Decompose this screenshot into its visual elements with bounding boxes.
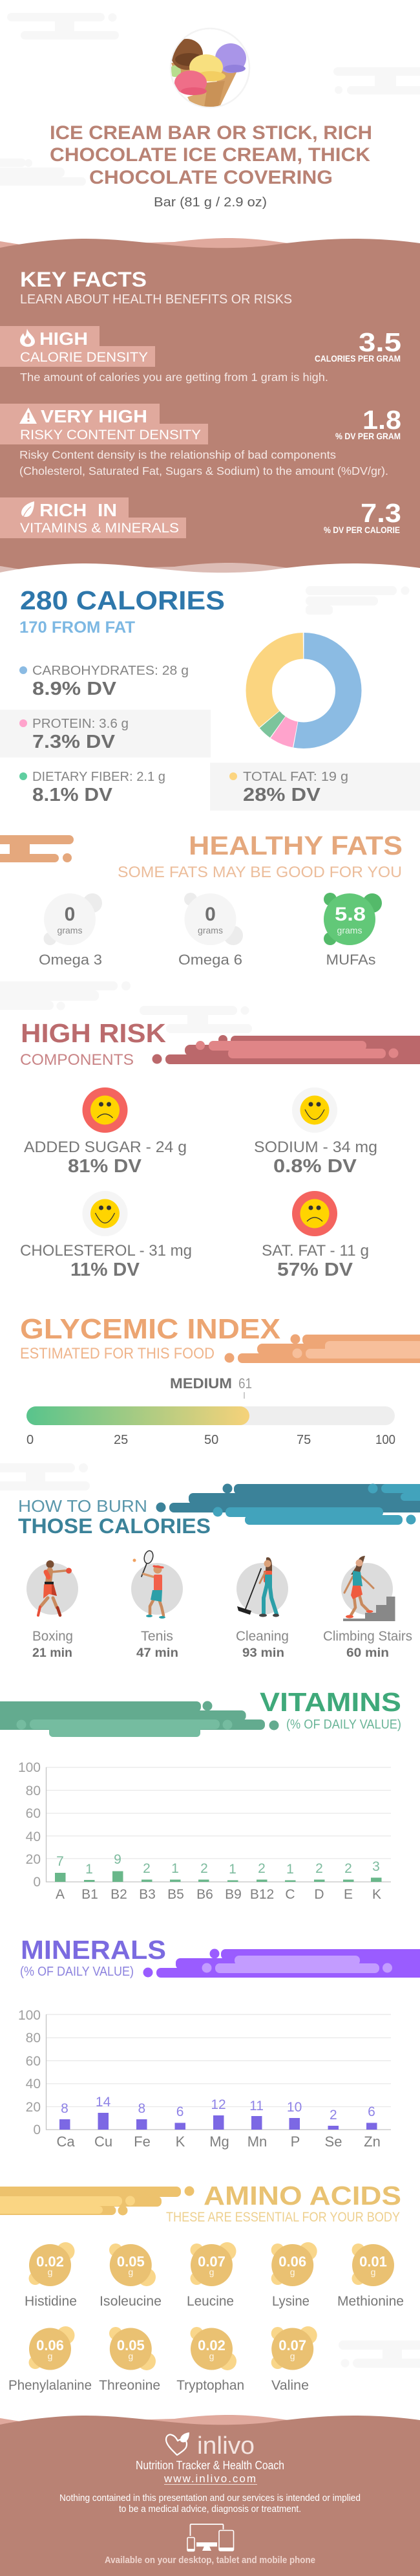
badge: omega 6: 0 bbox=[205, 904, 216, 925]
amino: tryptophan: Tryptophan bbox=[176, 2378, 244, 2393]
bar chart: minerals: Cu bbox=[94, 2134, 112, 2150]
subheading: from fat: 170 FROM FAT bbox=[19, 618, 135, 637]
amino: isoleucine: 0.05 bbox=[117, 2254, 145, 2269]
fact: calorie density: HIGH bbox=[39, 329, 88, 349]
activity: cleaning: 93 min bbox=[242, 1646, 284, 1660]
component: cholesterol: 11% DV bbox=[70, 1260, 140, 1280]
title: ICE CREAM BAR OR STICK, RICH bbox=[50, 122, 372, 144]
panel: healthy fats bbox=[0, 831, 403, 968]
component: sodium: 0.8% DV bbox=[273, 1156, 357, 1177]
heading: high risk: HIGH RISK bbox=[21, 1018, 166, 1048]
decorative banner bbox=[152, 1035, 420, 1064]
bar chart: vitamins: 2 bbox=[143, 1861, 151, 1876]
amino: isoleucine: Isoleucine bbox=[100, 2294, 162, 2309]
heading: minerals: MINERALS bbox=[21, 1935, 166, 1965]
subheading: ESTIMATED FOR THIS FOOD bbox=[20, 1345, 215, 1362]
amino: leucine: g bbox=[209, 2267, 214, 2277]
bar chart: minerals: 14 bbox=[96, 2095, 111, 2110]
component: saturated fat: 57% DV bbox=[277, 1260, 353, 1280]
badge: omega 3: grams bbox=[58, 925, 82, 935]
bar chart: vitamins: 1 bbox=[286, 1862, 294, 1877]
icon: leaf bbox=[21, 501, 34, 517]
amino: lysine: g bbox=[290, 2267, 295, 2277]
background cloud: left of high risk bbox=[0, 981, 131, 1010]
amino: methionine: Methionine bbox=[337, 2294, 404, 2309]
activity: climbing stairs: 60 min bbox=[346, 1646, 389, 1660]
gauge label bbox=[170, 1375, 252, 1399]
disclaimer bbox=[59, 2493, 361, 2515]
legend: dietary fiber bbox=[19, 770, 165, 805]
bar chart: minerals: Se bbox=[325, 2134, 342, 2150]
bar chart: vitamins: C bbox=[285, 1887, 295, 1902]
donut chart: macronutrients bbox=[259, 646, 348, 736]
bar chart: vitamins: B9 bbox=[225, 1887, 242, 1902]
legend: carbohydrates: 8.9% DV bbox=[32, 679, 117, 699]
fact: rich in vitamins and minerals: 7.3 bbox=[361, 498, 401, 528]
amino: threonine: g bbox=[128, 2351, 133, 2361]
fact: risky content density: % DV PER GRAM bbox=[335, 431, 401, 441]
panel: amino acids bbox=[0, 2181, 404, 2393]
fact: risky content density: RISKY CONTENT DENSITY bbox=[20, 428, 201, 442]
bar chart: minerals bbox=[18, 2008, 391, 2150]
amino: lysine: Lysine bbox=[272, 2294, 310, 2309]
title bbox=[50, 122, 372, 188]
icon: happy face bbox=[292, 1087, 337, 1133]
heading: 280 calories: 280 CALORIES bbox=[20, 585, 225, 615]
amino: histidine: 0.02 bbox=[36, 2254, 64, 2269]
decorative banner bbox=[156, 1484, 420, 1525]
background cloud: top left bbox=[7, 13, 119, 39]
fact: risky content density: Risky Content density is the relationship of bad components bbox=[19, 448, 336, 461]
heading: glycemic index: GLYCEMIC INDEX bbox=[20, 1313, 280, 1345]
bar chart: vitamins: B12 bbox=[250, 1887, 274, 1902]
icon: happy face bbox=[83, 1191, 128, 1236]
decorative banner bbox=[225, 1334, 420, 1363]
bar chart: vitamins: 7 bbox=[56, 1854, 64, 1869]
panel: calories bbox=[0, 585, 420, 811]
bar chart: minerals: 6 bbox=[368, 2104, 375, 2119]
amino: phenylalanine: g bbox=[48, 2351, 52, 2361]
legend: protein: 7.3% DV bbox=[32, 732, 116, 752]
amino: leucine: Leucine bbox=[187, 2294, 234, 2309]
activity: climbing stairs: Climbing Stairs bbox=[323, 1629, 412, 1644]
component: saturated fat: SAT. FAT - 11 g bbox=[262, 1242, 369, 1260]
amino: leucine bbox=[187, 2242, 236, 2309]
component: cholesterol: CHOLESTEROL - 31 mg bbox=[20, 1242, 192, 1260]
badge: omega 3: Omega 3 bbox=[39, 952, 102, 968]
decorative banner bbox=[0, 2187, 194, 2215]
amino: tryptophan: g bbox=[209, 2351, 214, 2361]
legend: protein bbox=[19, 717, 129, 752]
legend: total fat: 28% DV bbox=[243, 785, 321, 805]
badge: omega 6: Omega 6 bbox=[178, 952, 242, 968]
background cloud: bottom right bbox=[339, 2341, 420, 2368]
badge: omega 6: grams bbox=[198, 925, 223, 935]
decorative banner bbox=[143, 1948, 420, 1978]
bar chart: vitamins: 1 bbox=[85, 1862, 93, 1877]
legend: protein: PROTEIN: 3.6 g bbox=[32, 717, 129, 731]
subheading: LEARN ABOUT HEALTH BENEFITS OR RISKS bbox=[20, 292, 292, 307]
bar chart: minerals: 2 bbox=[330, 2108, 337, 2123]
bar chart: vitamins: B3 bbox=[139, 1887, 156, 1902]
badge: MUFAs: grams bbox=[337, 925, 362, 935]
bar chart: vitamins: 40 bbox=[26, 1829, 41, 1844]
bar chart: vitamins: B1 bbox=[81, 1887, 98, 1902]
bar chart: vitamins: B2 bbox=[110, 1887, 127, 1902]
panel: footer bbox=[0, 2415, 420, 2576]
heading: those calories: THOSE CALORIES bbox=[18, 1514, 211, 1538]
gauge scale: 0 bbox=[26, 1433, 34, 1447]
bar chart: minerals: Ca bbox=[57, 2134, 75, 2150]
bar chart: minerals: 8 bbox=[61, 2101, 68, 2116]
bar chart: vitamins: D bbox=[314, 1887, 324, 1902]
icon: boxer bbox=[26, 1560, 78, 1615]
amino: threonine: 0.05 bbox=[117, 2337, 145, 2353]
disclaimer: Nothing contained in this presentation and our services is intended or implied bbox=[59, 2493, 361, 2504]
decorative banner bbox=[0, 1701, 279, 1737]
fact: calorie density: CALORIE DENSITY bbox=[20, 350, 148, 365]
amino: tryptophan: 0.02 bbox=[198, 2337, 226, 2353]
gauge bar bbox=[26, 1406, 395, 1425]
icon: devices bbox=[187, 2524, 234, 2551]
gauge scale: 50 bbox=[204, 1433, 218, 1447]
subheading: (% OF DAILY VALUE) bbox=[20, 1965, 134, 1979]
bar chart: minerals: 8 bbox=[138, 2101, 145, 2116]
bar chart: vitamins: 2 bbox=[315, 1861, 323, 1876]
legend: carbohydrates bbox=[19, 664, 189, 699]
amino: valine: g bbox=[290, 2351, 295, 2361]
heading: key facts: KEY FACTS bbox=[20, 268, 147, 291]
panel: how to burn those calories bbox=[18, 1484, 420, 1660]
activity: boxing: Boxing bbox=[32, 1629, 73, 1644]
amino: methionine: 0.01 bbox=[359, 2254, 387, 2269]
bar chart: vitamins bbox=[18, 1760, 391, 1902]
background cloud: above high risk banner bbox=[140, 1006, 252, 1033]
heading: vitamins: VITAMINS bbox=[260, 1687, 401, 1717]
component: saturated fat bbox=[262, 1191, 369, 1280]
legend: total fat bbox=[229, 770, 348, 805]
heading: how to burn: HOW TO BURN bbox=[18, 1496, 147, 1516]
bar chart: minerals: 0 bbox=[33, 2123, 41, 2137]
component: sodium bbox=[254, 1087, 377, 1177]
bar chart: vitamins: 2 bbox=[344, 1861, 352, 1876]
panel: minerals bbox=[18, 1935, 420, 2150]
amino: tryptophan bbox=[176, 2327, 244, 2393]
bar chart: minerals: 40 bbox=[26, 2077, 41, 2091]
component: cholesterol bbox=[20, 1191, 192, 1280]
bar chart: minerals: Zn bbox=[364, 2134, 381, 2150]
bar chart: minerals: 6 bbox=[176, 2104, 184, 2119]
badge: omega 3: 0 bbox=[65, 904, 75, 925]
amino: phenylalanine bbox=[8, 2326, 92, 2393]
bar chart: vitamins: 1 bbox=[229, 1862, 236, 1877]
activity: tennis bbox=[131, 1550, 183, 1660]
serving size: Bar (81 g / 2.9 oz) bbox=[154, 195, 267, 210]
gauge scale: 100 bbox=[375, 1433, 395, 1447]
panel: key facts bbox=[0, 238, 420, 579]
bar chart: vitamins: 100 bbox=[18, 1760, 41, 1775]
disclaimer: to be a medical advice, diagnosis or treatment. bbox=[119, 2504, 301, 2515]
amino: histidine bbox=[25, 2242, 77, 2309]
bar chart: vitamins: 2 bbox=[258, 1861, 266, 1876]
logo: inlivo bbox=[166, 2432, 255, 2460]
background cloud: calories bbox=[306, 586, 410, 615]
bar chart: minerals: 12 bbox=[211, 2097, 226, 2112]
bar chart: minerals: Fe bbox=[134, 2134, 151, 2150]
activity: cleaning bbox=[236, 1557, 289, 1660]
amino: phenylalanine: Phenylalanine bbox=[8, 2378, 92, 2393]
amino: threonine: Threonine bbox=[99, 2378, 160, 2393]
tagline: Nutrition Tracker & Health Coach bbox=[136, 2459, 284, 2472]
amino: phenylalanine: 0.06 bbox=[36, 2337, 64, 2353]
amino: valine: 0.07 bbox=[278, 2337, 306, 2353]
amino: methionine: g bbox=[371, 2267, 375, 2277]
bar chart: minerals: K bbox=[176, 2134, 185, 2150]
activity: cleaning: Cleaning bbox=[236, 1629, 289, 1644]
gauge scale: 25 bbox=[114, 1433, 128, 1447]
icon: person climbing stairs bbox=[341, 1556, 395, 1621]
panel: glycemic index bbox=[20, 1313, 420, 1447]
activity: climbing stairs bbox=[323, 1556, 412, 1660]
fact: rich in vitamins and minerals: % DV PER CALORIE bbox=[324, 525, 400, 535]
fact: calorie density: The amount of calories you are getting from 1 gram is high. bbox=[20, 371, 328, 384]
bar chart: vitamins: E bbox=[344, 1887, 353, 1902]
heading: amino acids: AMINO ACIDS bbox=[204, 2181, 401, 2210]
website link: www.inlivo.com bbox=[163, 2472, 256, 2485]
icon: flame bbox=[20, 329, 35, 347]
legend: dietary fiber: DIETARY FIBER: 2.1 g bbox=[32, 770, 165, 784]
bar chart: vitamins: K bbox=[372, 1887, 381, 1902]
bar chart: vitamins: 2 bbox=[200, 1861, 208, 1876]
gauge scale: 75 bbox=[297, 1433, 311, 1447]
food photo: ice cream cones in a circle bbox=[169, 28, 249, 107]
fact: risky content density: (Cholesterol, Saturated Fat, Sugars & Sodium) to the amount (%DV/gr). bbox=[19, 464, 388, 477]
bar chart: vitamins: A bbox=[56, 1887, 65, 1902]
icon: person sweeping bbox=[236, 1557, 288, 1617]
bar chart: minerals: 80 bbox=[26, 2031, 41, 2046]
activity: tennis: Tenis bbox=[141, 1629, 173, 1644]
badge: omega 6 bbox=[178, 893, 243, 968]
subheading: components: COMPONENTS bbox=[20, 1051, 134, 1069]
legend: carbohydrates: CARBOHYDRATES: 28 g bbox=[32, 664, 189, 678]
amino: lysine bbox=[271, 2242, 317, 2309]
component: added sugar: 81% DV bbox=[68, 1156, 142, 1177]
fact: risky content density: 1.8 bbox=[362, 405, 401, 435]
badge: MUFAs bbox=[324, 893, 382, 968]
decorative banner bbox=[0, 835, 74, 862]
amino: histidine: g bbox=[48, 2267, 52, 2277]
gauge label: 61 bbox=[238, 1375, 252, 1392]
bar chart: vitamins: 1 bbox=[171, 1861, 179, 1876]
heading: healthy fats: HEALTHY FATS bbox=[189, 831, 403, 860]
activity: boxing bbox=[26, 1560, 78, 1660]
amino: methionine bbox=[337, 2243, 404, 2309]
subheading: (% OF DAILY VALUE) bbox=[286, 1718, 401, 1732]
bar chart: vitamins: B5 bbox=[167, 1887, 184, 1902]
bar chart: minerals: 60 bbox=[26, 2054, 41, 2069]
amino: histidine: Histidine bbox=[25, 2294, 77, 2309]
fact: rich in vitamins and minerals: RICH IN bbox=[39, 500, 117, 520]
bar chart: minerals: P bbox=[291, 2134, 300, 2150]
fact: calorie density bbox=[0, 326, 401, 384]
fact: rich in vitamins and minerals bbox=[0, 497, 401, 538]
bar chart: vitamins: 60 bbox=[26, 1806, 41, 1821]
amino: leucine: 0.07 bbox=[198, 2254, 226, 2269]
amino: isoleucine: g bbox=[128, 2267, 133, 2277]
legend: total fat: TOTAL FAT: 19 g bbox=[243, 770, 348, 784]
bar chart: vitamins: 0 bbox=[33, 1875, 41, 1890]
bar chart: minerals: 10 bbox=[287, 2100, 302, 2115]
fact: risky content density bbox=[0, 404, 401, 477]
bar chart: minerals: 100 bbox=[18, 2008, 41, 2023]
subheading: SOME FATS MAY BE GOOD FOR YOU bbox=[118, 864, 402, 881]
bar chart: vitamins: 20 bbox=[26, 1852, 41, 1867]
logo: inlivo: inlivo bbox=[197, 2432, 255, 2460]
activity: tennis: 47 min bbox=[136, 1646, 178, 1660]
bar chart: minerals: 11 bbox=[249, 2099, 264, 2113]
amino: threonine bbox=[99, 2327, 160, 2393]
icon: warning triangle bbox=[19, 408, 37, 424]
amino: lysine: 0.06 bbox=[278, 2254, 306, 2269]
title: CHOCOLATE ICE CREAM, THICK bbox=[50, 144, 370, 166]
bar chart: vitamins: 3 bbox=[372, 1859, 380, 1874]
bar chart: vitamins: 80 bbox=[26, 1784, 41, 1798]
background cloud: top right bbox=[333, 67, 420, 94]
availability note: Available on your desktop, tablet and mobile phone bbox=[105, 2555, 315, 2566]
icon: sad face bbox=[83, 1087, 128, 1133]
badge: MUFAs: MUFAs bbox=[326, 952, 376, 968]
background cloud: burn section bbox=[0, 1463, 90, 1490]
amino: valine bbox=[271, 2326, 317, 2393]
icon: tennis player bbox=[131, 1550, 183, 1619]
panel: high risk components bbox=[20, 1018, 420, 1280]
background cloud: behind title bbox=[0, 158, 86, 186]
amino: isoleucine bbox=[100, 2243, 162, 2309]
badge: omega 3 bbox=[39, 893, 102, 968]
bar chart: minerals: 20 bbox=[26, 2100, 41, 2115]
fact: risky content density: VERY HIGH bbox=[41, 406, 147, 426]
icon: sad face bbox=[292, 1191, 337, 1236]
fact: calorie density: 3.5 bbox=[359, 327, 401, 357]
bar chart: minerals: Mn bbox=[247, 2134, 267, 2150]
gauge label: MEDIUM bbox=[170, 1375, 232, 1392]
badge: MUFAs: 5.8 bbox=[335, 904, 366, 925]
bar chart: vitamins: B6 bbox=[196, 1887, 213, 1902]
bar chart: vitamins: 9 bbox=[114, 1852, 121, 1867]
amino: valine: Valine bbox=[271, 2378, 309, 2393]
component: added sugar bbox=[24, 1087, 187, 1177]
legend: dietary fiber: 8.1% DV bbox=[32, 785, 113, 805]
fact: rich in vitamins and minerals: VITAMINS & MINERALS bbox=[20, 521, 179, 536]
activity: boxing: 21 min bbox=[32, 1646, 72, 1660]
bar chart: minerals: Mg bbox=[209, 2134, 229, 2150]
gauge scale bbox=[26, 1433, 395, 1447]
component: added sugar: ADDED SUGAR - 24 g bbox=[24, 1139, 187, 1156]
panel: vitamins bbox=[0, 1687, 401, 1902]
fact: calorie density: CALORIES PER GRAM bbox=[315, 353, 401, 364]
title: CHOCOLATE COVERING bbox=[89, 167, 333, 188]
component: sodium: SODIUM - 34 mg bbox=[254, 1139, 377, 1156]
